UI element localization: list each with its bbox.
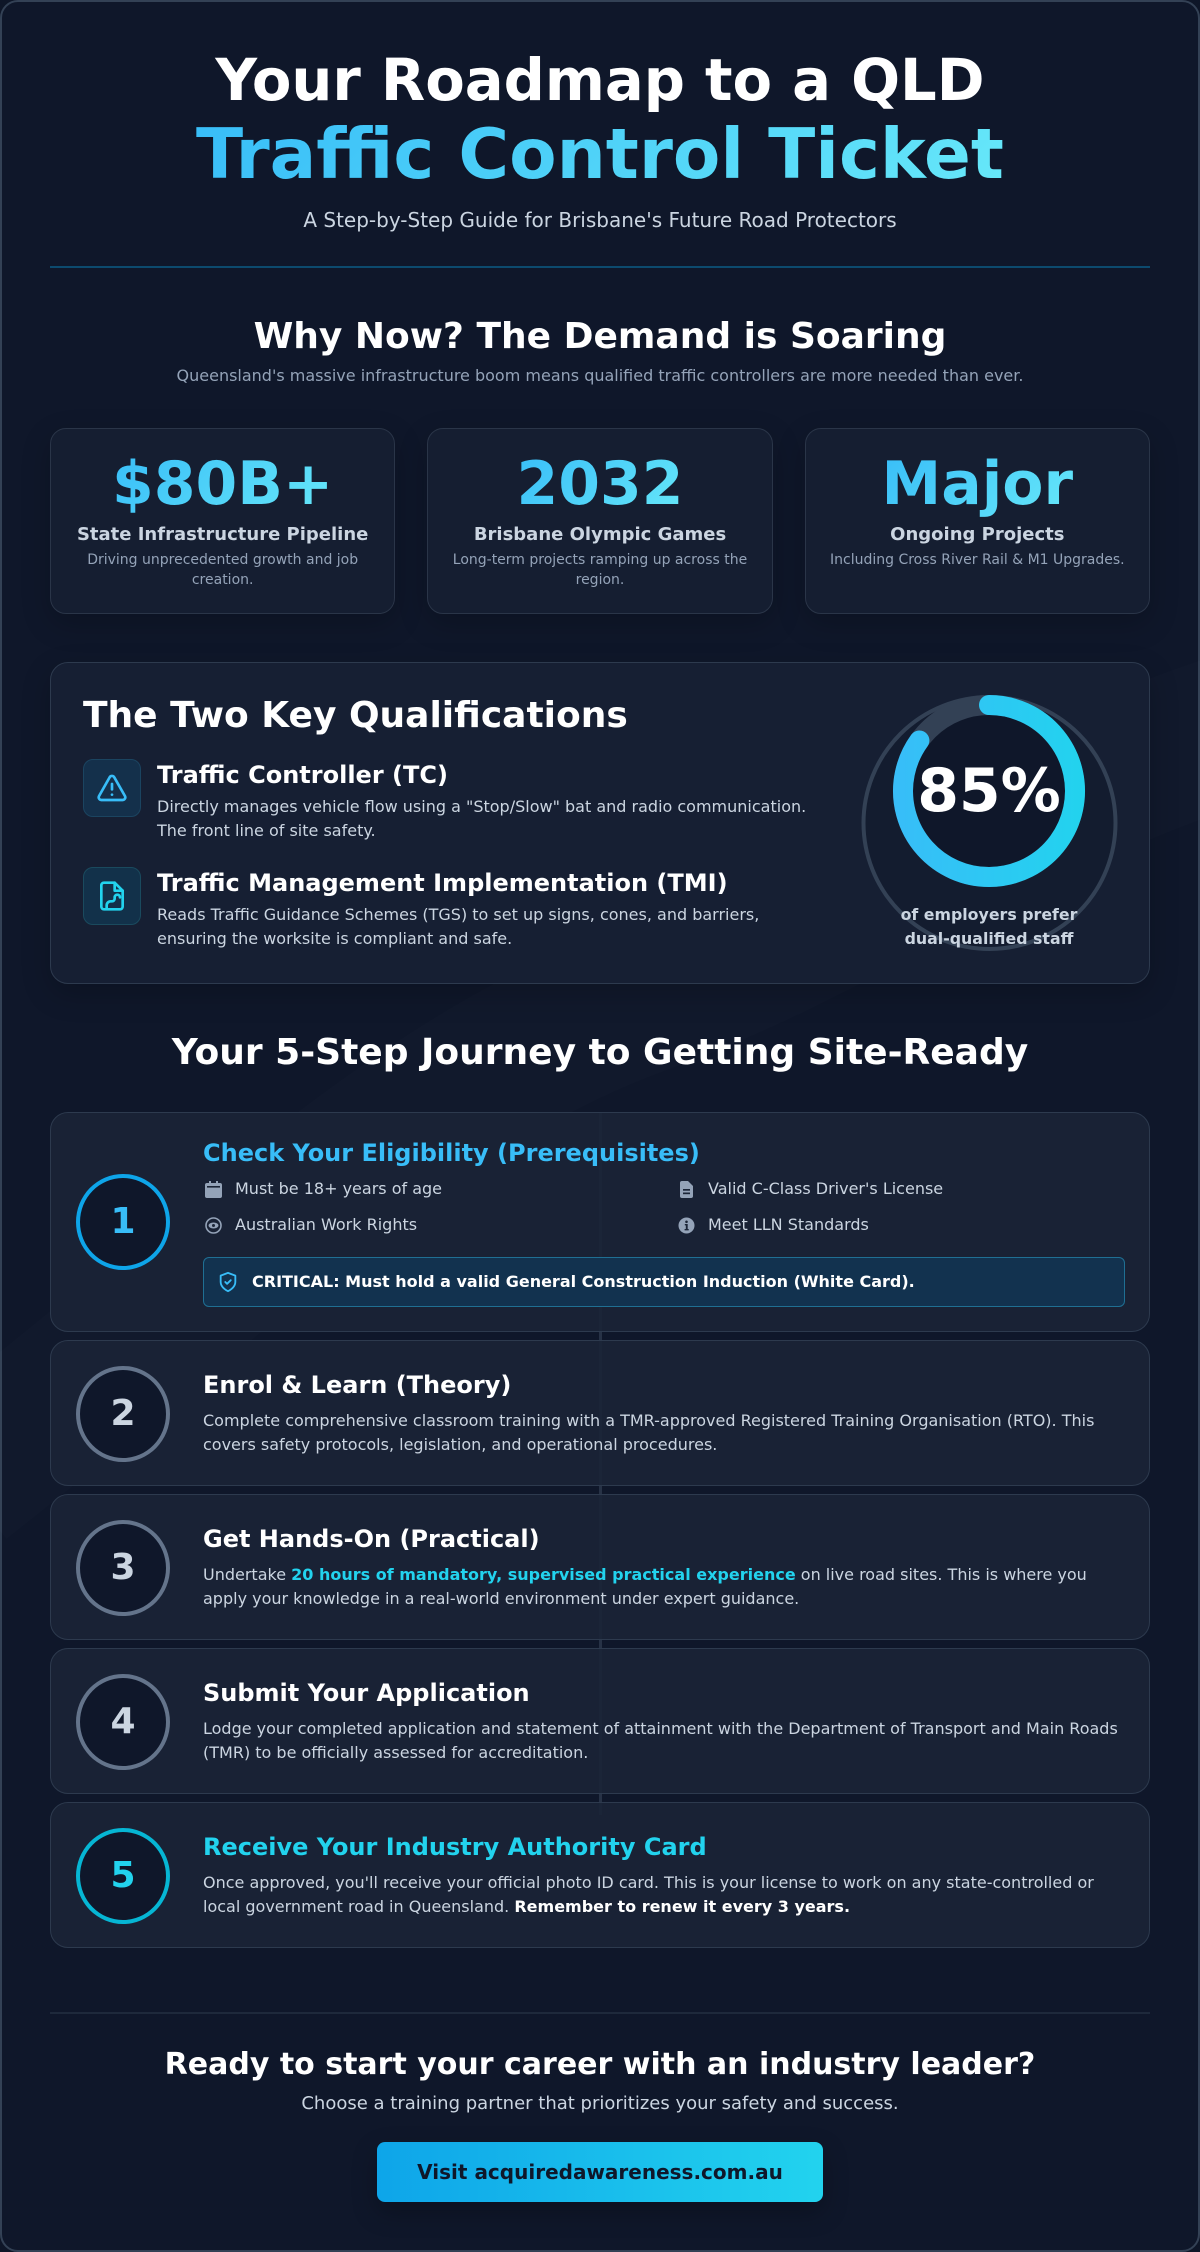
stat card: pipeline: creation.: [192, 572, 253, 588]
stat card: olympics: Long-term projects ramping up across the: [453, 552, 747, 568]
step number 3: 3: [110, 1547, 136, 1588]
step 4 text: Lodge your completed application and statement of attainment with the Department of Transport and Main Roads: [203, 1719, 1118, 1738]
step 2 text: [203, 1411, 1094, 1454]
qualification: traffic management implementation: ensuring the worksite is compliant and safe.: [157, 929, 512, 948]
step 5 text: local government road in Queensland. Remember to renew it every 3 years.: [203, 1897, 850, 1916]
item: age: Must be 18+ years of age: [235, 1179, 442, 1198]
centre timeline line: [599, 1112, 602, 1815]
icon: calendar: [205, 1181, 222, 1198]
icon: shield check: [220, 1272, 236, 1292]
step 5 title: Receive Your Industry Authority Card: [203, 1833, 707, 1861]
qualification: traffic management implementation: Traffic Management Implementation (TMI): [157, 869, 728, 897]
item: LLN: Meet LLN Standards: [708, 1215, 869, 1234]
step 3: [50, 1494, 1150, 1640]
stat card: olympics: [427, 428, 773, 614]
item: licence: Valid C-Class Driver's License: [708, 1179, 943, 1198]
intro text: Queensland's massive infrastructure boom means qualified traffic controllers are more needed than ever.: [177, 366, 1023, 385]
donut caption: of employers prefer: [901, 905, 1077, 924]
qualification: traffic controller: Directly manages vehicle flow using a "Stop/Slow" bat and radio communication.: [157, 797, 806, 816]
stat card: olympics: Brisbane Olympic Games: [474, 524, 726, 545]
step 3 title: Get Hands-On (Practical): [203, 1525, 540, 1553]
step 5 text: [203, 1873, 1094, 1916]
step number 4: 4: [110, 1701, 136, 1742]
step number 1: 1: [110, 1201, 136, 1242]
heading: why now: Why Now? The Demand is Soaring: [254, 316, 946, 357]
step number 3: [76, 1520, 170, 1616]
step 1 title: Check Your Eligibility (Prerequisites): [203, 1139, 700, 1167]
step number 4: [76, 1674, 170, 1770]
step number 1: [76, 1174, 170, 1270]
stat card: projects: Including Cross River Rail & M1 Upgrades.: [830, 552, 1125, 568]
stat card: projects: Ongoing Projects: [890, 524, 1064, 545]
step 2 title: Enrol & Learn (Theory): [203, 1371, 511, 1399]
stat card: pipeline: [50, 428, 395, 614]
title: [196, 47, 1004, 195]
footer text: Choose a training partner that prioritizes your safety and success.: [301, 2093, 899, 2114]
title: Traffic Control Ticket: [196, 115, 1004, 195]
callout: white card: [203, 1257, 1125, 1307]
callout text: CRITICAL: Must hold a valid General Construction Induction (White Card).: [252, 1272, 915, 1291]
stat card: projects: [805, 428, 1150, 614]
qualification: traffic controller: [156, 761, 806, 840]
qualification: traffic controller: Traffic Controller (TC): [157, 761, 448, 789]
donut caption: dual-qualified staff: [905, 929, 1073, 948]
step 4: [50, 1648, 1150, 1794]
step 4 text: [203, 1719, 1118, 1762]
step 2 text: covers safety protocols, legislation, and operational procedures.: [203, 1435, 717, 1454]
stat card: projects: Major: [882, 449, 1073, 519]
footer heading: Ready to start your career with an industry leader?: [165, 2047, 1035, 2082]
stat card: olympics: 2032: [516, 449, 683, 519]
step number 2: [76, 1366, 170, 1462]
qualification: traffic management implementation: [157, 869, 759, 948]
step 2 text: Complete comprehensive classroom training with a TMR-approved Registered Training Organisation (RTO). This: [203, 1411, 1094, 1430]
step 2: [50, 1340, 1150, 1486]
call to action button: Visit acquiredawareness.com.au: [417, 2160, 783, 2184]
qualification: traffic controller: The front line of site safety.: [157, 821, 376, 840]
qualification: traffic management implementation: Reads Traffic Guidance Schemes (TGS) to set up signs, cones, and barriers,: [157, 905, 759, 924]
subtitle: A Step-by-Step Guide for Brisbane's Future Road Protectors: [303, 208, 897, 232]
stat card: pipeline: State Infrastructure Pipeline: [77, 524, 368, 545]
step number 2: 2: [110, 1393, 136, 1434]
panel: qualifications: [50, 662, 1150, 984]
donut caption: [901, 905, 1078, 948]
title: Your Roadmap to a QLD: [215, 47, 985, 114]
call to action button: [377, 2142, 823, 2202]
heading: qualifications: The Two Key Qualifications: [83, 695, 628, 736]
step 3 text: apply your knowledge in a real-world environment under expert guidance.: [203, 1589, 799, 1608]
donut chart: 85 percent: [862, 695, 1118, 951]
icon: document: [680, 1181, 693, 1198]
icon: warning triangle: [83, 759, 141, 817]
step 1: [50, 1112, 1150, 1332]
step number 5: 5: [110, 1855, 136, 1896]
heading: 5-step journey: Your 5-Step Journey to Getting Site-Ready: [172, 1032, 1028, 1073]
icon: work rights eye: [205, 1217, 222, 1234]
step number 5: [76, 1828, 170, 1924]
stat card: olympics: region.: [576, 572, 624, 588]
icon: document chart: [83, 867, 141, 925]
step 5: [50, 1802, 1150, 1948]
step 5 text: Once approved, you'll receive your official photo ID card. This is your license to work on any state-controlled or: [203, 1873, 1094, 1892]
donut value: 85%: [917, 756, 1061, 826]
icon: info: [678, 1218, 694, 1234]
item: work rights: Australian Work Rights: [235, 1215, 417, 1234]
stat card: pipeline: Driving unprecedented growth and job: [87, 552, 358, 568]
step 3 text: Undertake 20 hours of mandatory, supervised practical experience on live road sites. This is where you: [203, 1565, 1087, 1584]
step 4 title: Submit Your Application: [203, 1679, 530, 1707]
step 4 text: (TMR) to be officially assessed for accreditation.: [203, 1743, 588, 1762]
stat card: pipeline: $80B+: [112, 449, 333, 519]
step 3 text: [203, 1565, 1087, 1608]
